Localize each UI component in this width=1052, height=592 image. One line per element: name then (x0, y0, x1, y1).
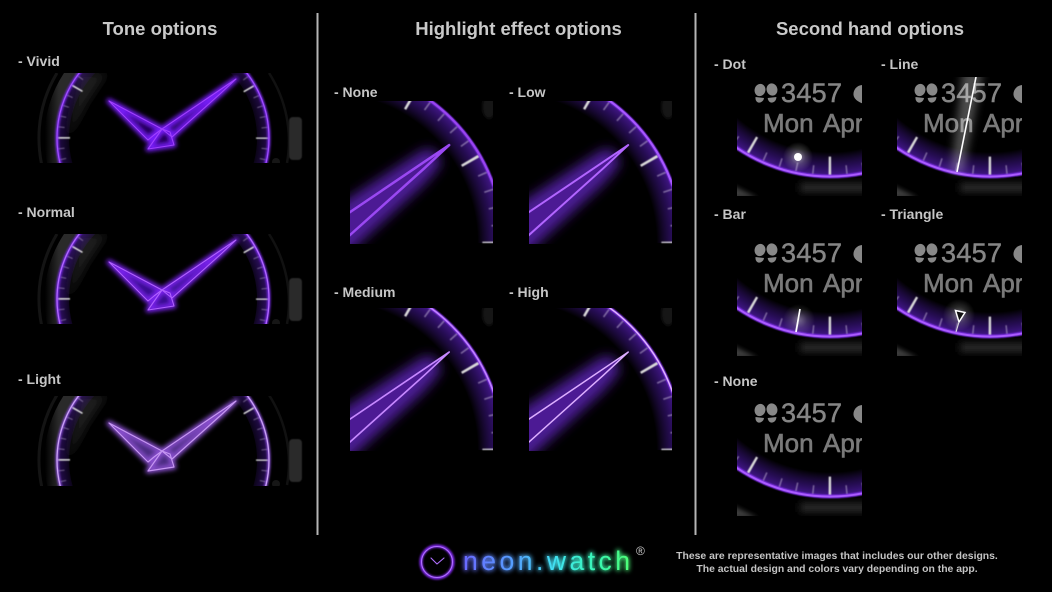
watch: light tone (38, 396, 302, 486)
label: Normal: - Normal (18, 204, 75, 220)
disclaimer text (676, 551, 998, 575)
label: Medium: - Medium (334, 284, 395, 300)
watch: no second hand: Mon (763, 428, 814, 458)
watch: bar second hand: 3457 (781, 238, 842, 268)
watch: no highlight (350, 101, 493, 244)
label: Low: - Low (509, 84, 546, 100)
watch: no second hand (737, 398, 864, 516)
watch: dot second hand (737, 78, 864, 196)
panel: highlight Low (505, 68, 682, 243)
second hand: bar (783, 304, 815, 336)
watch: triangle second hand (897, 238, 1024, 356)
wordmark glow: neon.watch (463, 546, 634, 576)
watch: bar second hand: Mon (763, 268, 814, 298)
disclaimer text: These are representative images that includes our other designs. (676, 551, 998, 562)
divider left (316, 13, 318, 535)
panel: second hand Dot (664, 0, 996, 198)
label: Light: - Light (18, 371, 61, 387)
panel: highlight Medium (326, 275, 503, 450)
second hand: triangle (943, 299, 975, 332)
heading: Highlight effect options: Highlight effect options (415, 18, 622, 39)
watch: no second hand: Apr (823, 428, 864, 458)
label: Vivid: - Vivid (18, 53, 60, 69)
watch: triangle second hand: Apr (983, 268, 1024, 298)
panel: tone Vivid (18, 32, 302, 244)
label: None: - None (714, 373, 758, 389)
watch: no second hand: 3457 (781, 398, 842, 428)
watch: line second hand: 3457 (941, 78, 1002, 108)
logo: neon.watch (421, 544, 645, 578)
watch: vivid tone (38, 73, 302, 163)
watch: dot second hand: 3457 (781, 78, 842, 108)
watch: medium highlight (350, 308, 493, 451)
watch: high highlight (529, 308, 672, 451)
label: Triangle: - Triangle (881, 206, 943, 222)
watch: bar second hand (737, 238, 864, 356)
watch: low highlight (529, 101, 672, 244)
watch: dot second hand: Mon (763, 108, 814, 138)
watch: line second hand (897, 77, 1024, 196)
label: High: - High (509, 284, 549, 300)
heading: Second hand options: Second hand options (776, 18, 964, 39)
heading: Tone options: Tone options (103, 18, 217, 39)
wordmark: neon.watch (463, 546, 634, 576)
second hand: dot (783, 142, 813, 172)
panel: second hand Triangle (824, 5, 1052, 358)
label: Dot: - Dot (714, 56, 746, 72)
divider right (694, 13, 696, 535)
panel: second hand Line (824, 0, 1052, 198)
panel: highlight None (326, 68, 503, 243)
second hand: line (951, 70, 983, 172)
label: None: - None (334, 84, 378, 100)
label: Line: - Line (881, 56, 919, 72)
panel: highlight High (505, 275, 682, 450)
watch: normal tone (38, 234, 302, 324)
icon: neon clock (421, 546, 453, 578)
watch: line second hand: Apr (983, 108, 1024, 138)
panel: second hand Bar (664, 5, 996, 358)
disclaimer text: The actual design and colors vary depending on the app. (696, 564, 978, 575)
watch: bar second hand: Apr (823, 268, 864, 298)
panel: second hand None (664, 165, 996, 518)
watch: triangle second hand: 3457 (941, 238, 1002, 268)
registered mark: ® (636, 544, 645, 558)
panel: tone Normal (18, 193, 302, 405)
watch: dot second hand: Apr (823, 108, 864, 138)
label: Bar: - Bar (714, 206, 746, 222)
watch: line second hand: Mon (923, 108, 974, 138)
watch: triangle second hand: Mon (923, 268, 974, 298)
panel: tone Light (18, 354, 302, 566)
